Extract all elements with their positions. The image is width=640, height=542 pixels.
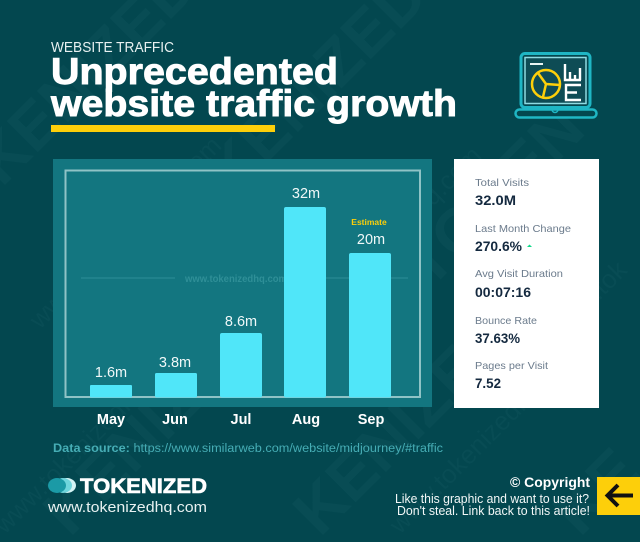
panel: website statistics — [454, 159, 599, 408]
bar: May: 1.6m — [95, 365, 127, 381]
stat: last month change — [475, 223, 571, 254]
background watermark pattern: www.tokenizedhq.com — [382, 335, 587, 540]
website url: www.tokenizedhq.com — [47, 499, 207, 516]
panel: bar chart — [53, 159, 432, 428]
stat: average visit duration: Avg Visit Duration — [475, 268, 563, 280]
bar: Jun: Jun — [162, 412, 188, 428]
stat: bounce rate: 37.63% — [475, 331, 520, 346]
stat: average visit duration: 00:07:16 — [475, 285, 532, 300]
chart background — [53, 159, 432, 407]
title: Unprecedented — [51, 51, 338, 92]
stat: bounce rate — [475, 315, 537, 346]
stat: average visit duration — [475, 268, 563, 300]
stat: last month change: 270.6% — [475, 239, 522, 254]
stat: total visits: 32.0M — [475, 193, 516, 208]
bar: Sep: 20m — [357, 232, 385, 248]
bar: Aug — [284, 186, 326, 428]
data source: Data source: https://www.similarweb.com/website/midjourney/#traffic — [53, 443, 443, 455]
background watermark pattern: www.tokenizedhq.com — [282, 140, 487, 345]
title — [50, 51, 457, 124]
background watermark pattern: www.tok — [542, 254, 633, 345]
background watermark pattern: www.tokenizedhq.com — [22, 130, 227, 335]
title: website traffic growth — [50, 83, 457, 124]
background watermark pattern: KENIZED — [29, 298, 279, 542]
bar: May: May — [97, 412, 125, 428]
bar: Jun — [155, 355, 197, 428]
bar: Aug: 32m — [292, 186, 320, 202]
bar: Jul: 8.6m — [225, 314, 257, 330]
bar: Sep — [349, 217, 391, 428]
chart watermark line: www.tokenizedhq.com — [184, 273, 287, 285]
title underline — [51, 125, 275, 132]
logo mark — [48, 478, 76, 493]
logo: tokenized: TOKENIZED — [80, 475, 207, 498]
copyright notice: Don't steal. Link back to this article! — [397, 504, 590, 518]
icon: laptop dashboard — [516, 54, 596, 118]
bar: Jul: Jul — [231, 412, 251, 428]
stat: total visits — [475, 177, 529, 208]
bar: Jun: 3.8m — [159, 355, 191, 371]
eyebrow: website traffic: WEBSITE TRAFFIC — [51, 39, 174, 56]
stat: total visits: Total Visits — [475, 177, 529, 189]
background watermark pattern: TOKEN — [389, 91, 597, 300]
stat: pages per visit: Pages per Visit — [475, 360, 548, 372]
bar: Jul — [220, 314, 262, 428]
stat: pages per visit — [475, 360, 548, 391]
bar: Aug: Aug — [292, 412, 320, 428]
copyright notice: Like this graphic and want to use it? — [395, 492, 589, 506]
bar: May — [90, 365, 132, 428]
chart frame — [66, 170, 420, 397]
bar: Sep: Estimate — [351, 217, 387, 227]
copyright notice: © Copyright — [510, 474, 590, 490]
background watermark pattern: KENIZED — [279, 298, 529, 542]
stat: pages per visit: 7.52 — [475, 376, 501, 391]
copyright notice — [395, 474, 590, 518]
stat: bounce rate: Bounce Rate — [475, 315, 537, 327]
bar: Sep: Sep — [358, 412, 384, 428]
icon: back arrow — [597, 477, 640, 515]
stat: last month change: Last Month Change — [475, 223, 571, 235]
